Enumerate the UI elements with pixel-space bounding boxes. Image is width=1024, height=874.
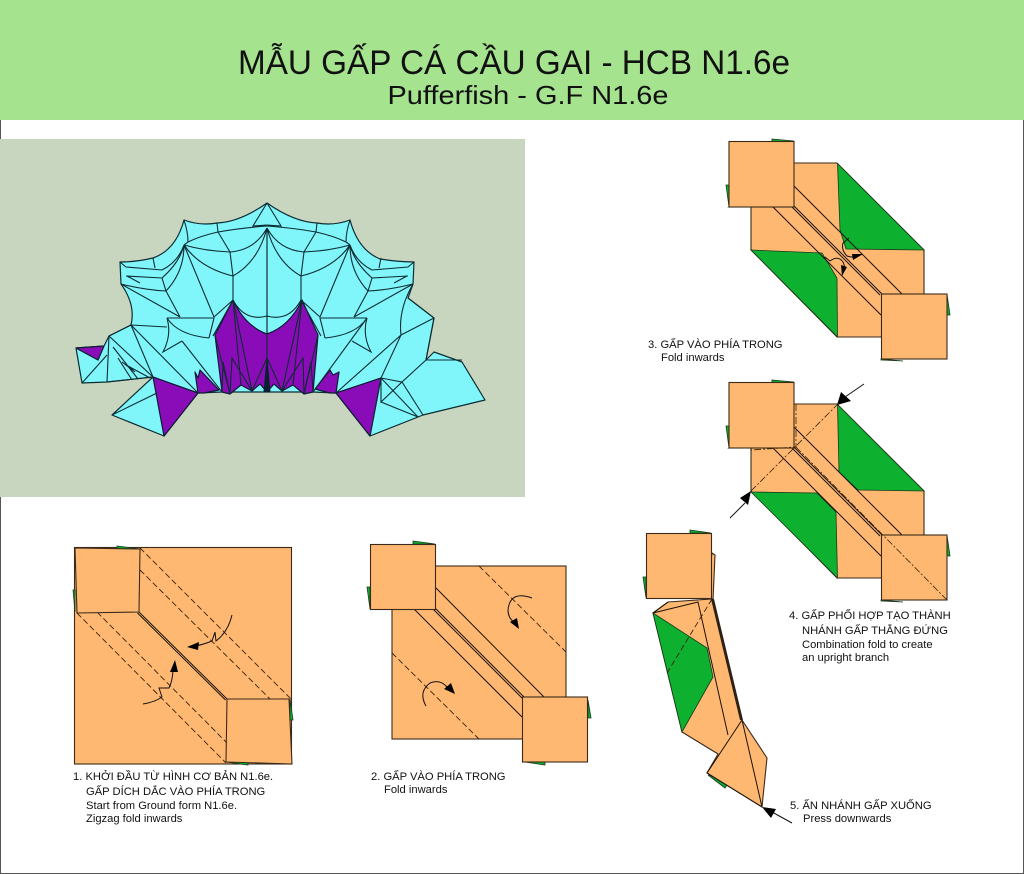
step 5 caption xyxy=(790,798,932,825)
folded body xyxy=(729,404,924,578)
step 1 caption: Start from Ground form N1.6e. xyxy=(86,800,237,812)
corner tabs xyxy=(367,541,591,765)
step 1 caption: 1. KHỞI ĐẦU TỪ HÌNH CƠ BẢN N1.6e. xyxy=(73,770,273,783)
belly fold lines xyxy=(215,300,318,394)
title: MẪU GẤP CÁ CẦU GAI - HCB N1.6e xyxy=(238,44,790,82)
fold lines xyxy=(773,427,902,556)
fold lines xyxy=(414,587,544,717)
branch body xyxy=(653,599,767,807)
step 2 caption: 2. GẤP VÀO PHÍA TRONG xyxy=(371,770,506,783)
step 1 caption: Zigzag fold inwards xyxy=(86,813,183,825)
step 5 caption: Press downwards xyxy=(803,813,892,825)
lower left fold lines xyxy=(76,325,222,415)
step 5 diagram xyxy=(643,530,792,823)
step 4 caption xyxy=(789,608,951,664)
step 2 caption xyxy=(371,770,506,796)
step 5 caption: 5. ẤN NHÁNH GẤP XUỐNG xyxy=(790,798,932,812)
upper fold lines xyxy=(120,203,267,352)
corner tabs xyxy=(643,530,727,788)
step 4 caption: Combination fold to create xyxy=(802,639,933,651)
mirrored upper fold lines xyxy=(267,203,414,352)
green flaps xyxy=(751,404,924,578)
step 1 caption xyxy=(73,770,273,825)
step 4 caption: an upright branch xyxy=(802,652,889,664)
step 1 caption: GẤP DÍCH DẮC VÀO PHÍA TRONG xyxy=(86,785,265,798)
base square xyxy=(392,566,566,739)
step 2 caption: Fold inwards xyxy=(384,784,448,796)
arrows: inward folds xyxy=(825,238,863,276)
illustration: pufferfish xyxy=(76,203,485,436)
dark edge xyxy=(711,599,743,720)
fold lines xyxy=(77,548,291,763)
green panel xyxy=(653,613,713,732)
back flap xyxy=(704,553,715,600)
fold lines xyxy=(653,602,762,807)
center spike xyxy=(264,358,270,392)
mountain fold lines xyxy=(751,404,947,600)
step 4 caption: NHÁNH GẤP THẲNG ĐỨNG xyxy=(802,624,948,637)
arrow: zigzag upper xyxy=(187,615,232,650)
arrow: press downward xyxy=(762,807,792,823)
corner flaps xyxy=(75,548,140,613)
arrow: upper right xyxy=(837,384,864,405)
step 3 caption xyxy=(648,338,783,364)
title banner xyxy=(0,0,1024,120)
arrow: lower fold xyxy=(423,682,455,706)
step 4 caption: 4. GẤP PHỐI HỢP TẠO THÀNH xyxy=(789,608,951,622)
arrow: upper fold xyxy=(508,596,532,629)
purple fins xyxy=(153,377,198,436)
fold lines xyxy=(773,186,902,315)
purple belly xyxy=(215,300,318,394)
base square xyxy=(74,548,292,764)
corner tabs xyxy=(726,380,950,602)
step 4 diagram xyxy=(726,380,950,602)
arrow: lower left xyxy=(730,491,751,518)
corner flap xyxy=(646,534,712,598)
step 2 diagram xyxy=(367,541,591,765)
corner tabs xyxy=(73,546,293,765)
step 1 diagram xyxy=(73,546,293,765)
folded body xyxy=(729,163,924,337)
subtitle: Pufferfish - G.F N1.6e xyxy=(388,80,668,110)
panel: finished pufferfish xyxy=(0,139,525,497)
arrow: zigzag lower xyxy=(143,660,178,704)
green flaps xyxy=(751,164,924,337)
corner flaps xyxy=(729,382,794,448)
step 3 caption: 3. GẤP VÀO PHÍA TRONG xyxy=(648,338,783,351)
corner flaps xyxy=(729,142,794,207)
fish body xyxy=(76,203,485,436)
lower right fold lines xyxy=(313,284,462,436)
corner flaps xyxy=(370,544,436,610)
step 3 caption: Fold inwards xyxy=(661,352,725,364)
corner tabs xyxy=(726,139,950,361)
step 3 diagram xyxy=(726,139,950,361)
